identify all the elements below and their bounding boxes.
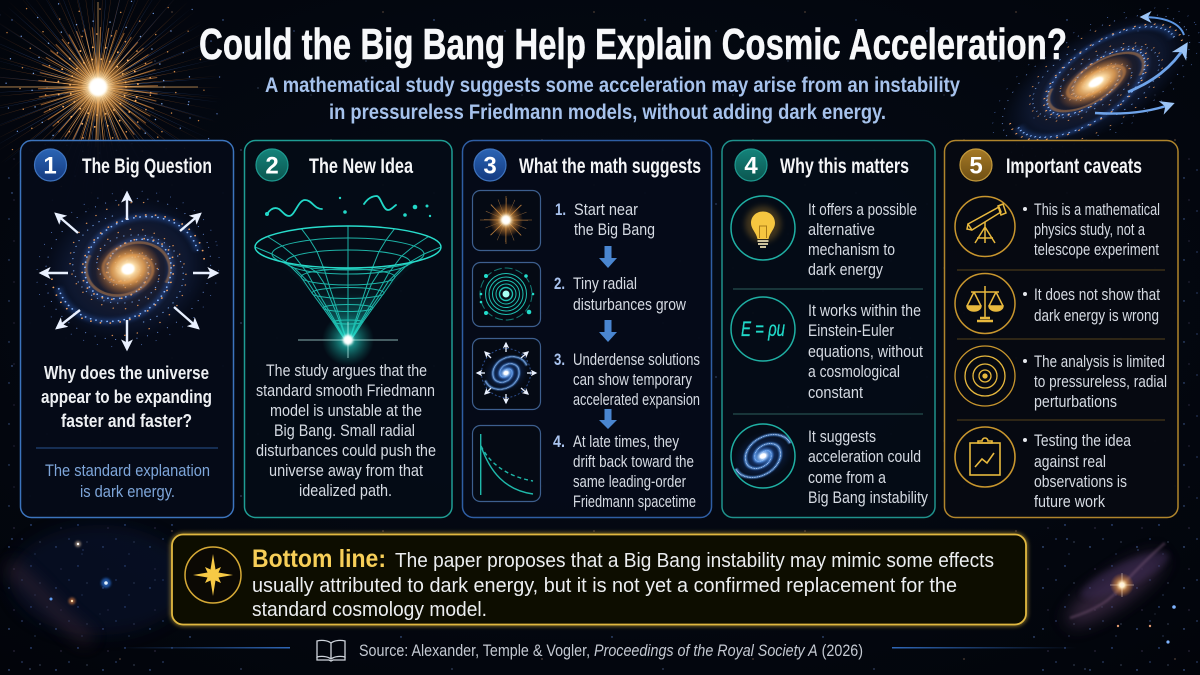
arrow	[599, 246, 617, 268]
caveat 3 text: perturbations	[1034, 392, 1117, 411]
bottom line text: standard cosmology model.	[252, 598, 487, 621]
caveat 1 text: This is a mathematical	[1034, 200, 1160, 219]
panel: why this matters	[722, 140, 935, 518]
step 1 text: 1.	[555, 200, 566, 219]
step 3 text	[554, 350, 700, 409]
reason 2 text: constant	[808, 383, 863, 402]
caveat 3 text	[1023, 352, 1167, 411]
reason 1 text: dark energy	[808, 260, 883, 279]
bottom line text: The paper proposes that a Big Bang instability may mimic some effects	[395, 549, 994, 572]
step 4 text: Friedmann spacetime	[573, 492, 696, 511]
reason 2 text: equations, without	[808, 342, 923, 361]
icon: radial rings step	[472, 262, 540, 326]
caveat 4 text: observations is	[1034, 472, 1127, 491]
reason 2 text	[808, 301, 923, 402]
step 3 text: Underdense solutions	[573, 350, 700, 369]
icon: expanding galaxy step	[472, 338, 540, 410]
badge 3	[474, 149, 506, 181]
caveat 4 text: future work	[1034, 492, 1105, 511]
callout: bottom line	[172, 534, 1026, 624]
step 2 text	[554, 274, 687, 314]
caveat 1 text: telescope experiment	[1034, 240, 1159, 259]
icon: blue galaxy	[730, 423, 796, 489]
body text: model is unstable at the	[270, 401, 422, 420]
standard explanation text: The standard explanation	[45, 461, 210, 480]
illustration: expanding spiral galaxy	[967, 0, 1200, 190]
step 2 text: Tiny radial	[573, 274, 637, 293]
reason 2 text: Einstein-Euler	[808, 321, 894, 340]
caveat 1 text: physics study, not a	[1034, 220, 1145, 239]
step 1 text: the Big Bang	[574, 220, 655, 239]
icon: clipboard chart	[955, 427, 1015, 487]
icon: starburst step	[472, 190, 540, 250]
body text: Big Bang. Small radial	[274, 421, 415, 440]
heading: What the math suggests	[519, 155, 701, 178]
body text: idealized path.	[299, 481, 392, 500]
panel: important caveats	[944, 140, 1178, 518]
body text: universe away from that	[269, 461, 423, 480]
step 1 text	[555, 200, 655, 239]
step 4 text: 4.	[553, 432, 565, 451]
step 3 text: 3.	[554, 350, 565, 369]
badge 2: 2	[265, 152, 279, 180]
reason 1 text	[808, 200, 917, 279]
caveat 2 text	[1023, 285, 1160, 325]
icon: disturbance waves	[265, 196, 431, 217]
panel: what the math suggests	[462, 140, 712, 518]
icon: light bulb	[731, 196, 795, 260]
badge 2	[256, 149, 288, 181]
step 2 text: 2.	[554, 274, 565, 293]
bottom line text	[252, 545, 994, 621]
icon: telescope	[955, 196, 1015, 256]
heading: The Big Question	[82, 155, 212, 178]
body text: The study argues that the	[266, 361, 427, 380]
reason 1 text: mechanism to	[808, 240, 895, 259]
caveat 3 text: The analysis is limited	[1034, 352, 1165, 371]
step 1 text: Start near	[574, 200, 638, 219]
badge 5: 5	[969, 152, 983, 180]
bottom line text: Bottom line:	[252, 545, 386, 573]
badge 4	[735, 149, 767, 181]
icon: gold star	[185, 547, 241, 603]
arrow	[599, 409, 617, 429]
heading: The New Idea	[309, 155, 413, 178]
body text	[256, 361, 436, 500]
caveat 2 text: dark energy is wrong	[1034, 306, 1159, 325]
reason 3 text: acceleration could	[808, 447, 921, 466]
panel: the new idea	[244, 140, 452, 518]
step 4 text: drift back toward the	[573, 452, 694, 471]
reason 3 text: come from a	[808, 468, 886, 487]
caveat 4 text: against real	[1034, 452, 1106, 471]
heading: Why this matters	[780, 155, 909, 178]
question text	[41, 363, 212, 431]
caveat 3 text: to pressureless, radial	[1034, 372, 1167, 391]
body text: standard smooth Friedmann	[256, 381, 435, 400]
step 2 text: disturbances grow	[573, 295, 687, 314]
source citation: Source: Alexander, Temple & Vogler, Proceedings of the Royal Society A (2026)	[359, 642, 863, 660]
question text: faster and faster?	[61, 411, 192, 431]
icon: concentric rings	[955, 346, 1015, 406]
icon: open book	[317, 640, 345, 661]
badge 1: 1	[43, 152, 57, 180]
chart: decay curves	[472, 426, 540, 502]
illustration: big bang starburst	[0, 0, 260, 249]
question text: appear to be expanding	[41, 387, 212, 407]
reason 2 text: a cosmological	[808, 362, 900, 381]
bottom line text: usually attributed to dark energy, but it is not yet a confirmed replacement for the	[252, 574, 957, 597]
panel: the big question	[17, 140, 239, 518]
badge 1	[34, 149, 66, 181]
body text: disturbances could push the	[256, 441, 436, 460]
icon: balance scales	[955, 274, 1015, 334]
reason 1 text: alternative	[808, 220, 875, 239]
caveat 2 text: It does not show that	[1034, 285, 1160, 304]
icon: equation: E = ρu	[741, 318, 785, 341]
subtitle: in pressureless Friedmann models, without adding dark energy.	[329, 101, 886, 124]
icon: equation	[731, 297, 795, 361]
caveat 4 text	[1023, 431, 1131, 511]
question text: Why does the universe	[44, 363, 209, 383]
reason 1 text: It offers a possible	[808, 200, 917, 219]
step 4 text	[553, 432, 696, 511]
reason 3 text: It suggests	[808, 427, 876, 446]
subtitle: A mathematical study suggests some acceleration may arise from an instability	[265, 74, 960, 97]
heading: Important caveats	[1006, 155, 1142, 178]
reason 3 text: Big Bang instability	[808, 488, 928, 507]
caveat 1 text	[1023, 200, 1160, 259]
standard explanation text	[45, 461, 210, 501]
badge 5	[960, 149, 992, 181]
subtitle	[265, 74, 960, 124]
reason 3 text	[808, 427, 928, 507]
step 3 text: can show temporary	[573, 370, 692, 389]
reason 2 text: It works within the	[808, 301, 921, 320]
step 3 text: accelerated expansion	[573, 390, 700, 409]
icon: expanding galaxy with arrows	[17, 164, 239, 374]
step 4 text: At late times, they	[573, 432, 679, 451]
caveat 4 text: Testing the idea	[1034, 431, 1131, 450]
step 4 text: same leading-order	[573, 472, 686, 491]
standard explanation text: is dark energy.	[80, 482, 175, 501]
badge 3: 3	[483, 152, 497, 180]
arrow	[599, 320, 617, 342]
chart: funnel of spacetime converging on the big bang	[255, 226, 441, 366]
badge 4: 4	[744, 152, 758, 180]
